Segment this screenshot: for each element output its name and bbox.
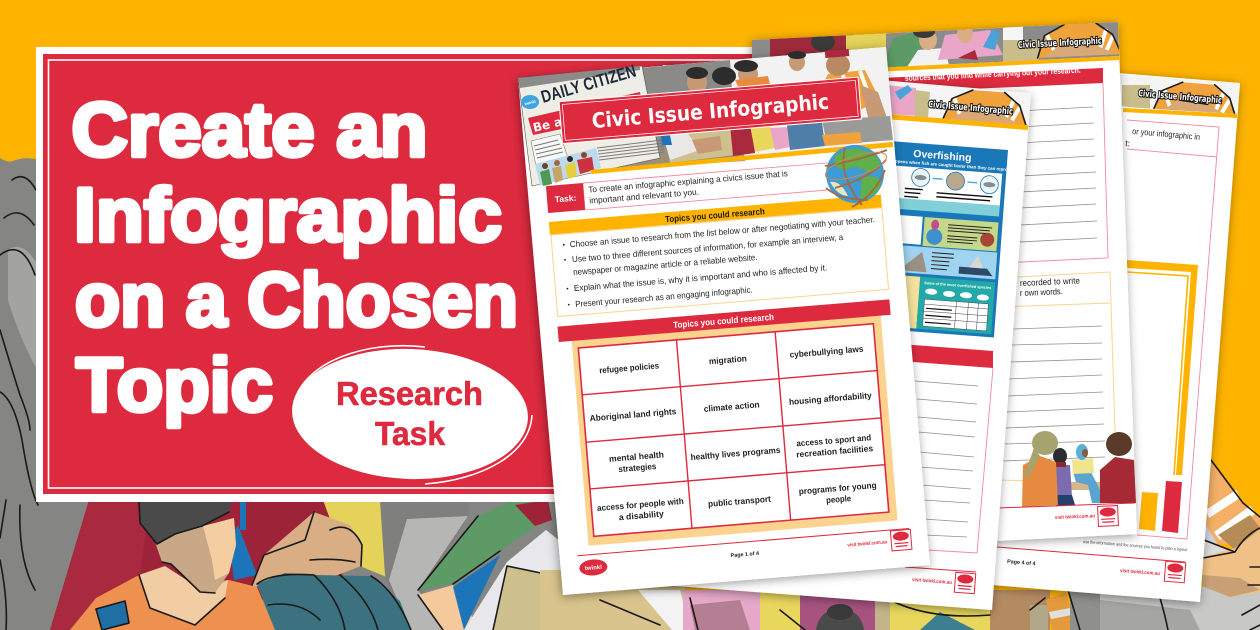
topic cell: mental health strategies	[609, 449, 665, 475]
topics grid	[578, 324, 889, 536]
red story box	[528, 92, 644, 135]
topic cell: programs for young people: programs for young	[798, 480, 877, 496]
infographic subtitle: Overfishing happens when fish are caught faster than they can reproduce.	[864, 156, 1019, 173]
page 4 footer	[997, 547, 1186, 583]
fishing cycle diagram	[873, 164, 1002, 217]
masthead: DAILY CITIZEN	[539, 61, 638, 107]
banner: Civic Issue Infographic: Civic Issue Infographic	[591, 90, 830, 133]
page 4 instruction box	[1127, 120, 1219, 539]
page 2 footer: visit twinkl.com.au	[912, 577, 952, 586]
task row	[546, 163, 834, 213]
page 3: research notes worksheet	[752, 20, 1137, 552]
title: Create an Infographic on a Chosen Topic: on a Chosen	[75, 258, 518, 343]
illustration: striped sleeve and hand on the right	[1100, 445, 1260, 630]
page 4 footer: visit twinkl.com.au	[1120, 568, 1160, 577]
title: Create an Infographic on a Chosen Topic: Topic	[76, 343, 273, 428]
page 2 pink box	[928, 368, 993, 553]
page 4 fine print: use the information and the sources you found to plan a layout	[1083, 539, 1188, 552]
twinkl cloud logo	[521, 95, 539, 109]
task row: Task:	[554, 193, 577, 204]
topic cell: access to sport and recreation facilities: recreation facilities	[796, 443, 874, 459]
topic cell: Aboriginal land rights: Aboriginal land rights	[589, 406, 677, 423]
fishing boat tile	[884, 244, 997, 279]
newspaper text stripes	[534, 140, 664, 160]
page 4 instruction text: or your infographic in	[1132, 126, 1201, 142]
bullet 2	[564, 232, 845, 278]
illustration: crowd along the bottom left	[50, 500, 565, 630]
page 4 yellow bar	[1139, 492, 1158, 531]
page 3 yellow writing box	[1000, 272, 1115, 481]
footer	[577, 528, 912, 577]
page 2 header label: Civic Issue Infographic	[928, 100, 1013, 117]
topic cell: mental health strategies: mental health	[609, 449, 664, 464]
table tile: Some of the most overfished species	[924, 281, 991, 290]
topic cell: migration: migration	[708, 353, 747, 366]
badge: Research Task: Research	[336, 375, 483, 412]
page 3 writing lines	[1003, 326, 1105, 461]
page 3 footer: visit twinkl.com.au	[1055, 513, 1095, 521]
page 3 header label: Civic Issue Infographic	[1018, 37, 1102, 51]
website: visit twinkl.com.au	[847, 539, 888, 549]
page 4 yellow frame	[1127, 260, 1198, 475]
twinkl logo: twinkl	[585, 565, 602, 572]
peach panel behind topics	[572, 313, 898, 546]
page 3 header illustration	[752, 22, 1119, 68]
bullet 4: Present your research as an engaging infographic.	[575, 285, 753, 309]
badge: Research Task	[290, 345, 532, 484]
page 3 instruction text: r own words.	[1020, 286, 1063, 298]
stamp logo	[890, 529, 912, 551]
data tile	[897, 215, 923, 245]
yellow heading: Topics you could research: Topics you could research	[665, 206, 765, 224]
red heading: Topics you could research: Topics you could research	[673, 312, 774, 330]
page 1 header illustration	[590, 47, 893, 170]
page number: Page 1 of 4	[730, 551, 759, 559]
red story box: Be a	[532, 115, 563, 135]
page 4 instruction text	[1125, 126, 1201, 148]
cream tile	[899, 276, 920, 329]
page 3 pink notes box	[1000, 83, 1108, 263]
illustration: crowd along the bottom centre	[540, 570, 1190, 630]
title: Create an Infographic on a Chosen Topic: Create an	[72, 88, 428, 173]
page 4 red bar	[1162, 481, 1182, 533]
newspaper: Daily Citizen	[518, 61, 664, 186]
banner: Civic Issue Infographic	[559, 77, 862, 144]
bullet 2: newspaper or magazine article or a reliable website.	[573, 252, 758, 277]
page 1 yellow header strip	[590, 142, 893, 174]
page 3 footer	[998, 503, 1135, 526]
page 3 red heading bar: sources that you find while carrying out your research.	[905, 65, 1081, 83]
globe facts tile	[923, 217, 999, 251]
red heading: Topics you could research	[558, 299, 891, 342]
page 2 writing lines	[915, 381, 978, 537]
page 4 yellow header strip	[1123, 108, 1237, 118]
page 2 yellow header strip	[885, 114, 1028, 130]
badge: Research Task: Task	[375, 415, 446, 452]
page 4: back worksheet	[994, 69, 1245, 610]
bullet 3: Explain what the issue is, why it is important and who is affected by it.	[573, 262, 827, 293]
page 4 header illustration	[1120, 75, 1240, 114]
panel: white frame with red title board	[36, 47, 766, 502]
newspaper photo of four teenagers	[535, 148, 601, 186]
page 4 instruction text: t:	[1125, 138, 1130, 148]
page 2 header illustration	[888, 80, 1031, 125]
illustration: grey figure on the left	[0, 158, 560, 630]
topic cell: access for people with a disability: a disability	[618, 509, 664, 522]
topic cell: access for people with a disability	[597, 496, 685, 524]
page 2 red bar	[900, 344, 993, 368]
example infographic: Overfishing	[852, 139, 1021, 338]
page 3 notes lines	[1000, 107, 1097, 243]
page 1: main worksheet	[518, 47, 930, 595]
twinkl cloud logo: twinkl	[524, 99, 536, 106]
twinkl logo	[579, 558, 608, 577]
topic cell: healthy lives programs: healthy lives programs	[690, 445, 781, 462]
topic cell: programs for young people: people	[826, 493, 852, 505]
topic cell: access to sport and recreation facilities	[795, 432, 874, 459]
page 2 footer	[905, 567, 976, 594]
table tile	[916, 277, 995, 334]
topic cell: housing affordability: housing affordability	[789, 390, 872, 407]
topic cell: public transport: public transport	[708, 494, 771, 509]
topic cell: cyberbullying laws: cyberbullying laws	[789, 344, 864, 360]
page 3 red heading bar	[860, 65, 1103, 94]
bullet 2: Use two to three different sources of information, for example an interview, a	[572, 232, 844, 264]
page 4 header label: Civic Issue Infographic	[1138, 89, 1222, 106]
title: Create an Infographic on a Chosen Topic	[72, 88, 518, 428]
topic cell: programs for young people	[798, 480, 878, 507]
task row: To create an infographic explaining a civics issue that is	[588, 168, 788, 195]
topic cell: mental health strategies: strategies	[618, 461, 657, 474]
page 1 content	[539, 76, 912, 577]
topic cell: climate action: climate action	[703, 399, 760, 414]
title: Create an Infographic on a Chosen Topic: Infographic	[74, 173, 502, 258]
illustration: four teenagers talking	[1022, 431, 1136, 507]
task row: important and relevant to you.	[589, 187, 699, 206]
page 2: example infographic worksheet	[624, 65, 1035, 610]
bullet 1: Choose an issue to research from the list below or after negotiating with your teacher.	[569, 214, 875, 249]
newspaper text column	[531, 134, 568, 166]
yellow heading: Topics you could research	[549, 195, 882, 235]
topic cell: refugee policies: refugee policies	[599, 360, 660, 375]
topic cell: access to sport and recreation facilities: access to sport and	[796, 432, 872, 448]
page 4 footer: Page 4 of 4	[1007, 559, 1036, 567]
page 3 instruction text	[1020, 275, 1080, 298]
topic cell: access for people with a disability: access for people with	[597, 496, 684, 513]
icon: globe wrapped in ribbons	[822, 145, 890, 207]
instructions box	[551, 208, 889, 317]
page 3 yellow header strip	[752, 56, 1119, 78]
page 3 instruction text: recorded to write	[1020, 275, 1080, 288]
infographic title: Overfishing	[913, 148, 972, 164]
